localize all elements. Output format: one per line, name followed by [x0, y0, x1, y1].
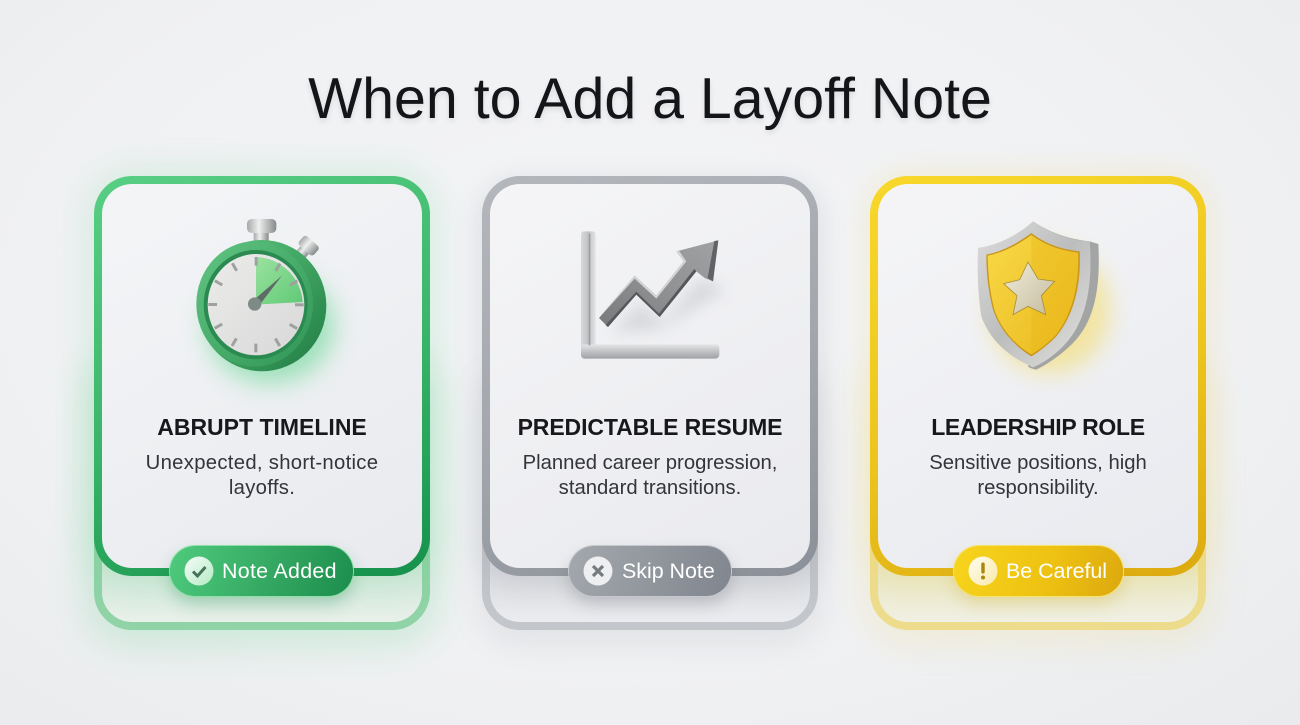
description: Planned career progression, — [523, 452, 777, 474]
description — [523, 452, 777, 499]
back card: green — [94, 356, 430, 630]
back card: gray — [482, 356, 818, 630]
heading: LEADERSHIP ROLE — [931, 414, 1145, 440]
icon: cross — [584, 556, 612, 586]
panel: predictable resume — [467, 176, 833, 644]
back card: yellow — [870, 356, 1206, 630]
panel: leadership role — [847, 162, 1229, 654]
description: layoffs. — [229, 477, 295, 499]
description — [929, 452, 1147, 499]
icon: rising chart arrow — [581, 231, 720, 359]
icon: shield with star — [976, 222, 1122, 386]
main card: green — [94, 176, 430, 576]
badge: be careful — [954, 546, 1123, 596]
description: responsibility. — [977, 477, 1099, 499]
heading: ABRUPT TIMELINE — [157, 414, 367, 440]
heading: PREDICTABLE RESUME — [518, 414, 782, 440]
badge: skip note: Skip Note — [622, 559, 715, 583]
icon: exclamation — [968, 556, 998, 586]
badge: note added — [170, 546, 353, 596]
description: Sensitive positions, high — [929, 452, 1147, 474]
main card: gray — [482, 176, 818, 576]
main card: yellow — [870, 176, 1206, 576]
badge: note added: Note Added — [222, 559, 337, 583]
description: Unexpected, short-notice — [146, 452, 378, 474]
description: standard transitions. — [559, 477, 741, 499]
icon: check — [184, 556, 214, 586]
title: When to Add a Layoff Note — [308, 67, 992, 131]
icon: stopwatch — [192, 219, 348, 398]
badge: be careful: Be Careful — [1006, 559, 1107, 583]
panel: abrupt timeline — [64, 160, 460, 659]
description — [146, 452, 378, 499]
badge: skip note — [569, 546, 731, 596]
